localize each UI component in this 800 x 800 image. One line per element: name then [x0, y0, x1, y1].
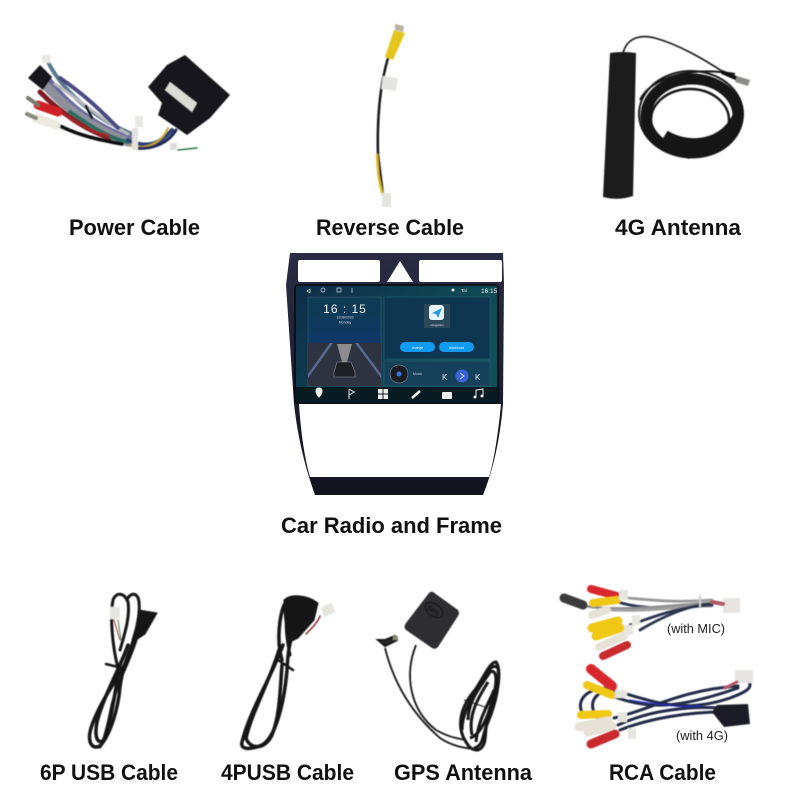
- navigation card: change: [412, 346, 423, 350]
- clock card: [308, 297, 381, 386]
- icon: GPS antenna: GPS: [426, 606, 440, 618]
- label: 6P USB Cable: 6P USB Cable: [40, 760, 178, 785]
- note: with 4G: (with 4G): [676, 728, 728, 743]
- icon: reverse cable: [377, 24, 405, 207]
- frame: [286, 253, 504, 495]
- label: 4G Antenna: 4G Antenna: [615, 215, 742, 240]
- label: Car Radio and Frame: Car Radio and Frame: [281, 513, 502, 538]
- clock card: 12/28/2020: [336, 316, 354, 320]
- icon: RCA cable with MIC: [564, 589, 740, 656]
- clock card: Monday: [339, 320, 351, 324]
- navigation card: [384, 297, 490, 359]
- label: Power Cable: Power Cable: [69, 215, 200, 240]
- icon: 4G antenna: [603, 37, 750, 199]
- music card: K: [475, 373, 481, 382]
- icon: RCA cable with 4G: [579, 669, 753, 744]
- dock icons: [316, 388, 484, 399]
- music card: K: [442, 373, 448, 382]
- navigation card: navigation: [430, 323, 444, 327]
- clock card: 16 : 15: [323, 302, 367, 316]
- music card: [384, 361, 490, 386]
- car radio and frame: [286, 253, 504, 495]
- icon: power cable harness: [27, 55, 230, 150]
- frame top vents: [298, 260, 502, 282]
- label: Reverse Cable: Reverse Cable: [316, 215, 464, 240]
- label: GPS Antenna: GPS Antenna: [394, 760, 533, 785]
- status bar: [307, 288, 498, 295]
- navigation card: download: [449, 346, 464, 350]
- label: RCA Cable: RCA Cable: [609, 760, 716, 785]
- note: with MIC: (with MIC): [667, 621, 725, 636]
- icon: GPS antenna: [378, 592, 499, 750]
- touch screen: [295, 285, 498, 403]
- label: 4PUSB Cable: 4PUSB Cable: [221, 760, 354, 785]
- status bar: Tal: [461, 288, 467, 293]
- status bar: 16:15: [481, 288, 498, 295]
- icon: 6P USB cable: [90, 594, 157, 747]
- frame lower white panel: [299, 404, 501, 477]
- icon: 4P USB cable: [242, 596, 336, 748]
- music card: Music: [413, 372, 422, 376]
